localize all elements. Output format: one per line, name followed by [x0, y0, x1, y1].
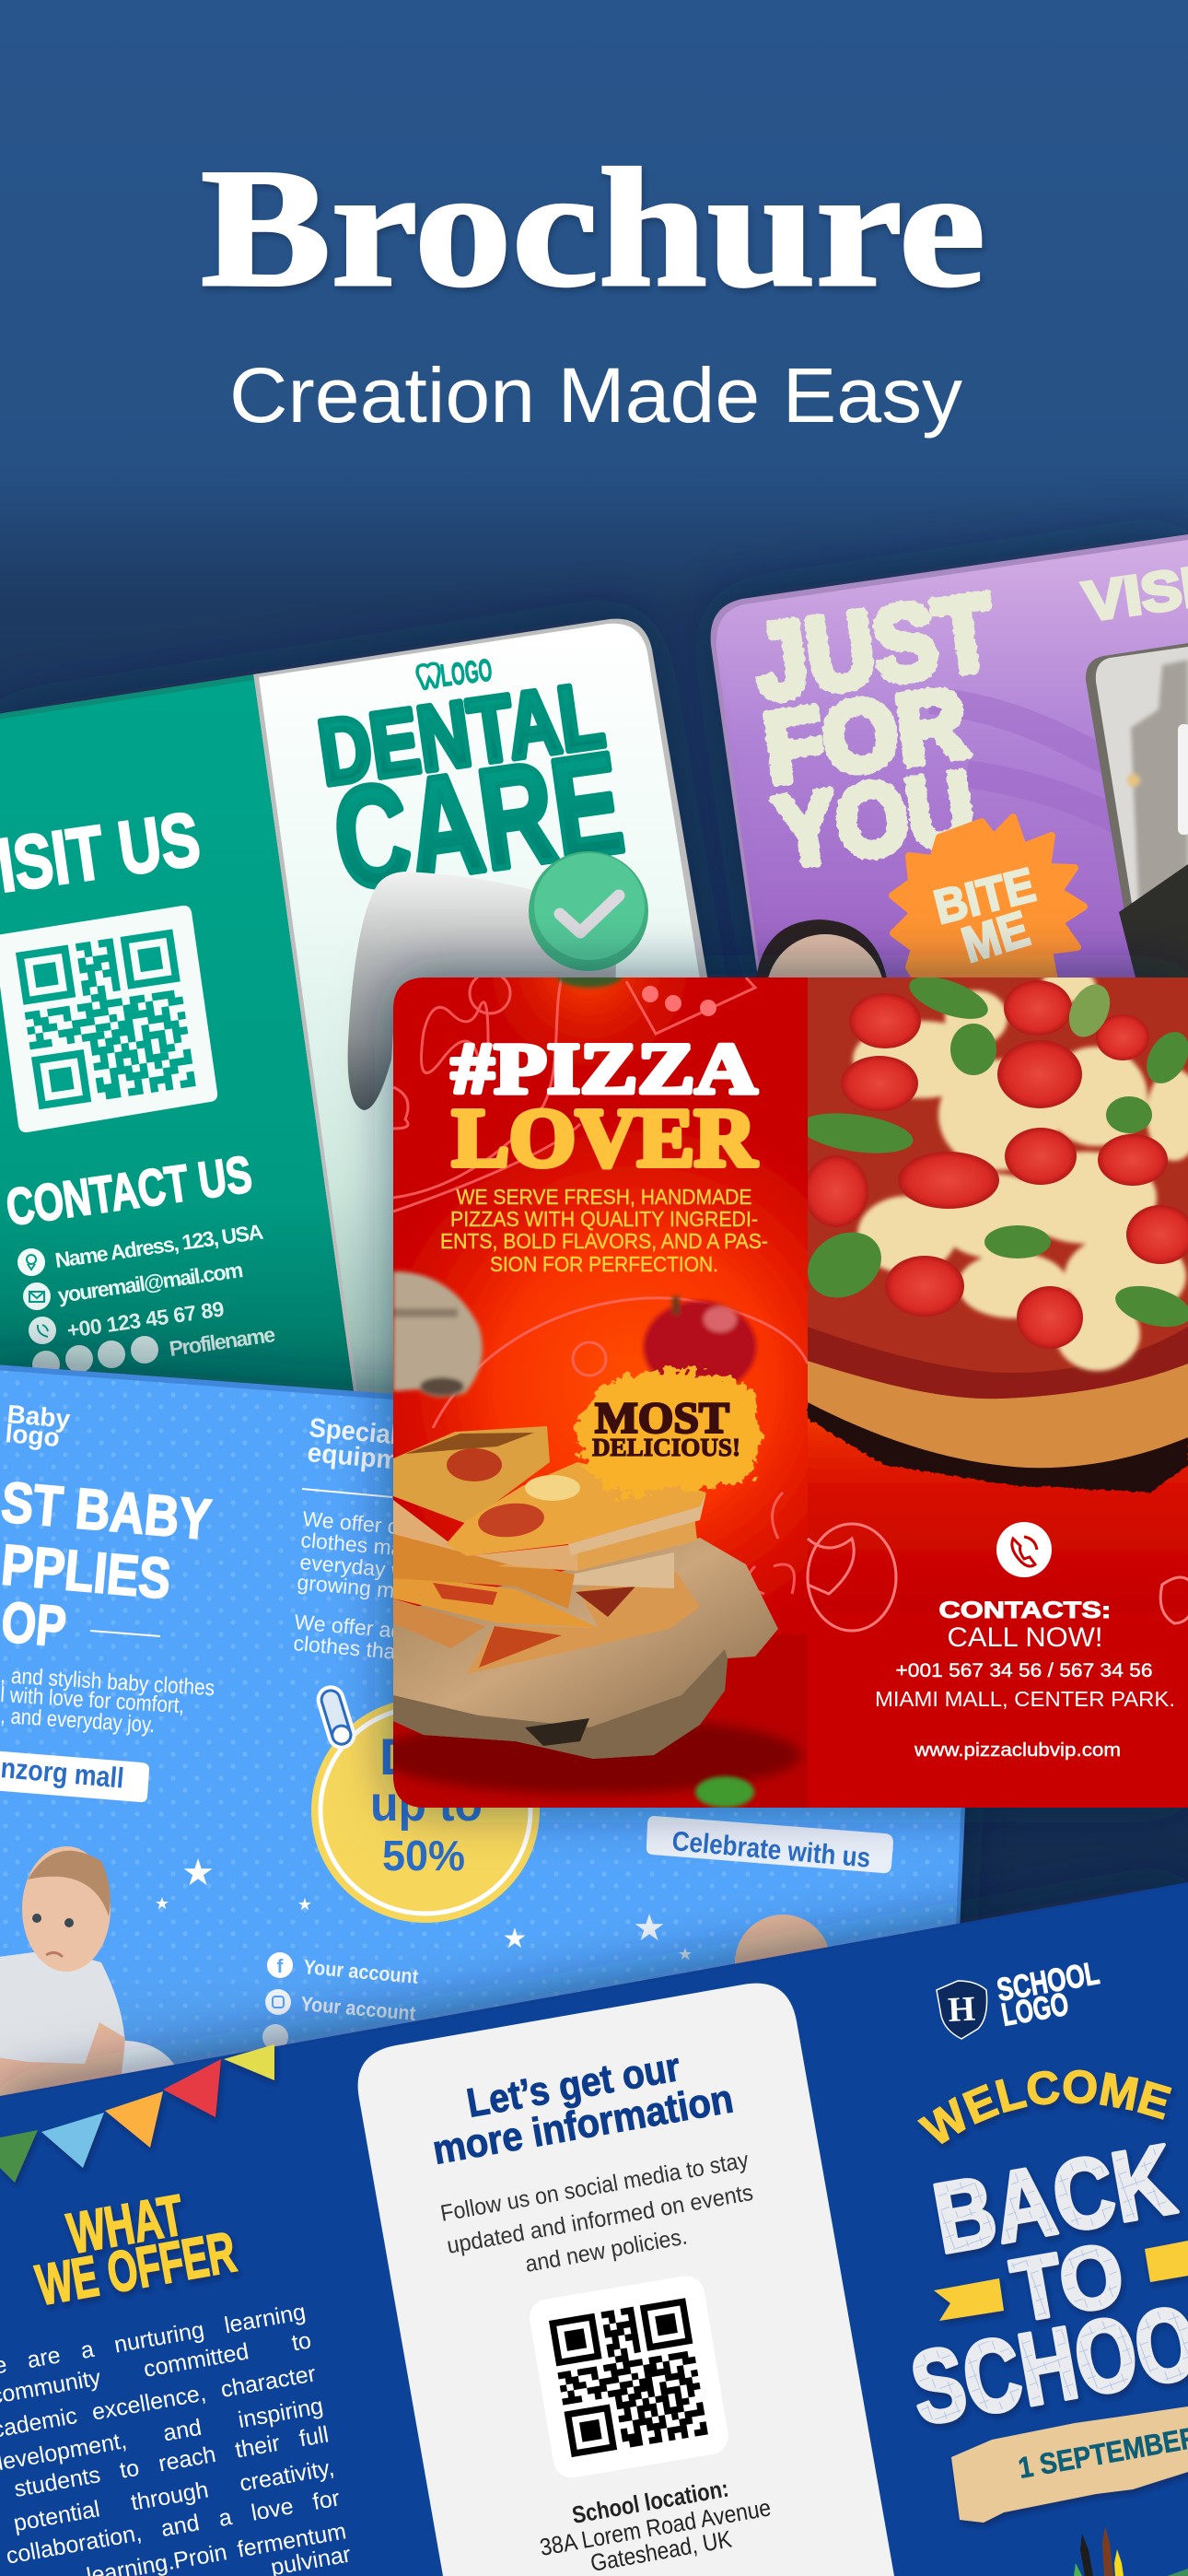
body copy: SION FOR PERFECTION.	[490, 1252, 718, 1276]
splash badge	[578, 1369, 760, 1495]
school logo	[937, 1955, 1102, 2039]
splash badge: DELICIOUS!	[592, 1434, 740, 1461]
location: School location:	[570, 2474, 730, 2529]
location: 38A Lorem Road Avenue	[538, 2493, 773, 2561]
pizza photo	[796, 968, 1188, 1475]
panel: pizza brochure	[378, 962, 1188, 1808]
left panel background	[393, 978, 808, 1808]
contact rows: +00 123 45 67 89	[65, 1296, 226, 1342]
heading: lover: LOVER	[452, 1093, 757, 1184]
card body	[0, 1364, 982, 2156]
body copy	[0, 2299, 353, 2576]
info heading: more information	[429, 2076, 737, 2173]
white panel	[253, 619, 764, 1419]
social rows	[262, 1952, 420, 2050]
pizza slices	[393, 1426, 706, 1674]
logo: logo	[4, 1419, 61, 1452]
stars: ★	[297, 1895, 312, 1914]
welcome heading: WELCOME	[917, 2069, 1175, 2149]
body copy: potential through creativity,	[12, 2454, 336, 2536]
mushroom	[393, 1271, 483, 1397]
welcome arc	[936, 2102, 1162, 2149]
stars: ★	[155, 1894, 169, 1913]
contacts: MIAMI MALL, CENTER PARK.	[875, 1687, 1175, 1711]
info copy: updated and informed on events	[445, 2180, 755, 2259]
social rows: Your account	[303, 1955, 420, 1988]
contacts: www.pizzaclubvip.com	[914, 1740, 1121, 1761]
basil	[796, 968, 1188, 1334]
intro copy	[0, 1663, 215, 1738]
social rows: Your account	[300, 1992, 417, 2025]
tooth	[348, 872, 617, 1110]
tomato doodles	[808, 1524, 1188, 1631]
heading: pizza: #PIZZA	[451, 1028, 757, 1108]
body copy: WE SERVE FRESH, HANDMADE	[457, 1185, 751, 1209]
intro copy: , and everyday joy.	[0, 1704, 156, 1738]
badge: bite me: ME	[956, 901, 1035, 973]
logo: LOGO	[438, 652, 495, 694]
photo: baby	[0, 1846, 181, 2133]
body copy: PIZZAS WITH QUALITY INGREDI-	[450, 1207, 758, 1231]
info copy	[438, 2147, 755, 2277]
discount badge: 50%	[382, 1832, 465, 1879]
button: celebrate: Celebrate with us	[670, 1826, 871, 1874]
stars	[155, 1853, 693, 1963]
just for you heading: JUST	[747, 571, 1001, 723]
pencils	[1074, 2526, 1188, 2576]
doodles	[393, 973, 808, 1594]
location: Gateshead, UK	[588, 2524, 734, 2576]
badge: bite me: BITE	[929, 859, 1041, 935]
heading: dental care	[312, 663, 632, 920]
special equipment copy	[293, 1413, 411, 1664]
info copy: and new policies.	[523, 2223, 689, 2277]
social rows: f	[277, 1957, 284, 1977]
button: celebrate	[646, 1816, 893, 1874]
body copy: collaboration, and a love for	[5, 2485, 342, 2570]
tomato	[644, 1296, 756, 1393]
logo	[4, 1399, 72, 1452]
heading: back to school: TO	[1005, 2224, 1131, 2341]
card body	[0, 1882, 1188, 2576]
photo: building	[1086, 643, 1188, 978]
top slices	[393, 1426, 550, 1524]
subtitle: Creation Made Easy	[229, 352, 962, 439]
panel: dental brochure	[0, 619, 764, 1419]
bunting	[0, 2044, 274, 2183]
stars: ★	[181, 1853, 215, 1893]
school logo: LOGO	[999, 1986, 1071, 2033]
blurred basil top	[553, 978, 625, 991]
special equipment copy: equipm	[306, 1438, 401, 1476]
contact rows: youremail@mail.com	[56, 1258, 245, 1307]
school logo: SCHOOL	[995, 1955, 1102, 2008]
contacts	[875, 1598, 1175, 1761]
heading: best baby supplies shop: ST BABY	[0, 1470, 214, 1552]
body copy: ENTS, BOLD FLAVORS, AND A PAS-	[440, 1229, 768, 1253]
intro copy: , and stylish baby clothes	[0, 1663, 215, 1701]
right panel background	[808, 978, 1188, 1808]
discount badge: D	[379, 1727, 416, 1786]
heading: contact us: CONTACT US	[3, 1144, 255, 1236]
contact rows	[17, 1219, 277, 1378]
heading: what we offer	[31, 2184, 240, 2318]
contacts: CALL NOW!	[947, 1622, 1103, 1653]
discount badge: up to	[370, 1776, 483, 1832]
panel: baby brochure	[0, 1364, 982, 2156]
check badge	[529, 851, 648, 971]
torn paper	[951, 2406, 1188, 2523]
special equipment copy: Special	[308, 1413, 399, 1450]
tomatoes	[804, 980, 1188, 1349]
heading: best baby supplies shop: OP	[0, 1590, 69, 1659]
contacts: +001 567 34 56 / 567 34 56	[895, 1660, 1153, 1681]
contact rows: Profilename	[168, 1322, 277, 1361]
heading: best baby supplies shop: PPLIES	[0, 1533, 173, 1611]
heading: dental care: DENTAL	[312, 663, 610, 805]
person: head	[756, 919, 887, 1052]
photo: baby two	[735, 1914, 831, 2010]
button: mall: nzorg mall	[0, 1751, 125, 1795]
icon: phone	[996, 1522, 1052, 1577]
special equipment copy: clothes ma	[300, 1528, 404, 1561]
stars: ★	[633, 1908, 666, 1949]
logo: Baby	[6, 1399, 72, 1434]
just for you heading	[747, 571, 1001, 890]
blurred basil bottom	[695, 1776, 754, 1808]
info panel	[358, 1984, 894, 2576]
heading: visit us: ISIT US	[0, 797, 204, 908]
ribbons	[934, 2241, 1188, 2321]
body copy: students to reach their full	[12, 2421, 331, 2502]
special equipment copy: everyday w	[299, 1550, 408, 1583]
info heading: Let’s get our	[463, 2044, 683, 2126]
special equipment copy: We offer ad	[294, 1610, 403, 1643]
just for you heading: YOU	[768, 750, 981, 890]
stars: ★	[503, 1924, 527, 1954]
intro copy: l with love for comfort,	[0, 1682, 185, 1718]
middle slices	[393, 1575, 599, 1628]
school logo: H	[947, 1989, 976, 2030]
person: sleeve	[1119, 864, 1188, 978]
discount badge	[311, 1698, 540, 1923]
title: Brochure	[201, 134, 985, 322]
heading: best baby supplies shop	[0, 1470, 214, 1659]
card body	[711, 534, 1188, 978]
teal panel	[0, 674, 357, 1419]
info copy: Follow us on social media to stay	[438, 2147, 751, 2227]
splash badge: MOST	[595, 1394, 729, 1443]
rule	[90, 1631, 160, 1636]
wood board	[378, 1538, 801, 1794]
heading: dental care: CARE	[325, 722, 632, 920]
body copy	[440, 1185, 768, 1276]
cheese	[853, 969, 1188, 1371]
just for you heading: FOR	[757, 665, 973, 804]
contacts: CONTACTS:	[939, 1598, 1111, 1623]
icon: safety pin	[315, 1683, 357, 1751]
heading: what we offer: WE OFFER	[31, 2220, 240, 2318]
logo	[416, 652, 495, 694]
location	[538, 2474, 773, 2576]
badge: bite me	[892, 817, 1084, 986]
special equipment copy: growing me	[297, 1570, 407, 1603]
contact rows: Name Adress, 123, USA	[53, 1219, 264, 1272]
bottom slices	[393, 1598, 485, 1648]
special equipment copy: clothes that	[293, 1631, 403, 1664]
stars: ★	[678, 1945, 693, 1963]
panel: purple brochure	[711, 534, 1188, 1052]
heading: back to school	[903, 2123, 1188, 2447]
heading: what we offer: WHAT	[63, 2184, 189, 2266]
panel: school brochure	[0, 1879, 1188, 2576]
qr card	[0, 906, 217, 1132]
special equipment copy: We offer cu	[302, 1506, 411, 1540]
qr card	[527, 2273, 731, 2480]
